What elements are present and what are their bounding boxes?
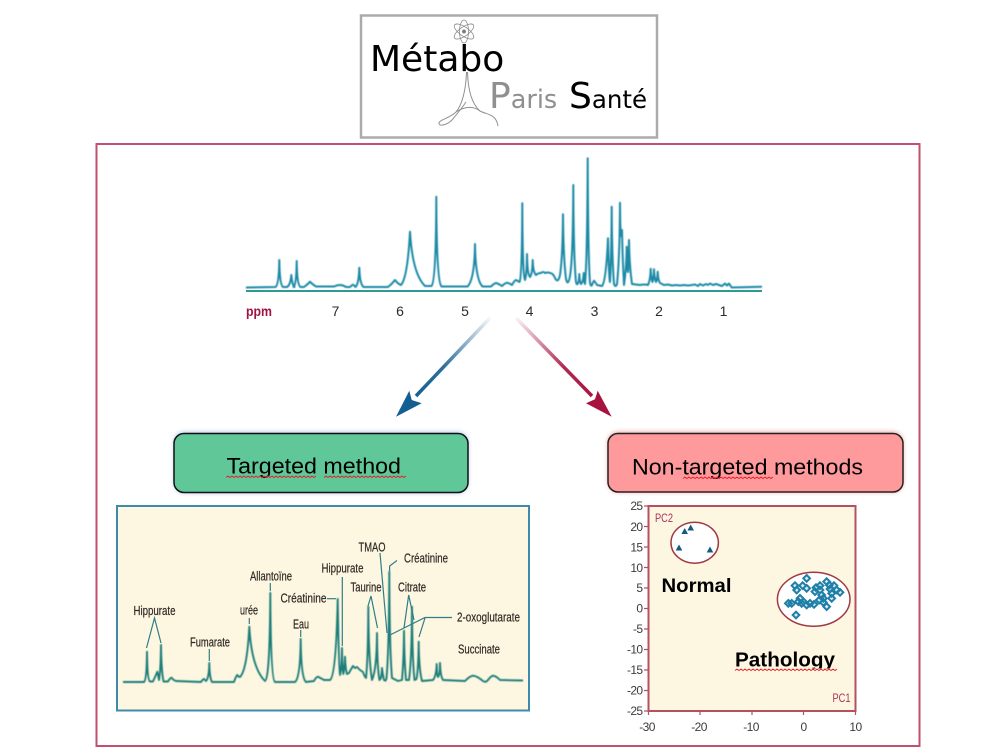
y axis labels: 0 xyxy=(636,602,643,616)
spectrum axis labels: 2 xyxy=(655,303,663,319)
y axis labels: 5 xyxy=(636,581,643,595)
box: non-targeted methods xyxy=(608,432,903,492)
spectrum axis labels: 7 xyxy=(332,303,340,319)
x axis labels: 0 xyxy=(800,720,807,734)
box: targeted method: Targeted method xyxy=(226,454,401,479)
connector lines xyxy=(146,553,452,661)
x axis labels: 10 xyxy=(849,720,862,734)
panel: targeted spectrum xyxy=(117,506,529,710)
logo text: Santé xyxy=(569,76,647,117)
metabolite labels: Fumarate xyxy=(190,636,230,650)
metabolite labels: 2-oxoglutarate xyxy=(457,610,520,624)
y axis labels: -10 xyxy=(627,642,643,656)
panel: main frame xyxy=(96,144,920,746)
spectrum axis labels: 1 xyxy=(720,303,728,319)
spectrum axis labels: 3 xyxy=(591,303,599,319)
label: Normal: Normal xyxy=(662,575,732,597)
logo: Métabo Paris Santé xyxy=(361,16,657,138)
spectrum axis labels: ppm xyxy=(246,303,272,319)
metabolite labels: Créatinine xyxy=(404,552,448,566)
spectrum axis labels: 6 xyxy=(396,303,404,319)
metabolite labels: TMAO xyxy=(358,540,386,554)
x axis labels: -20 xyxy=(691,720,708,734)
axis names: PC2 xyxy=(655,513,673,525)
x axis labels xyxy=(639,720,862,734)
box: targeted method xyxy=(174,432,468,493)
metabolite labels: Taurine xyxy=(350,580,382,594)
metabolite labels: Créatinine xyxy=(280,592,327,606)
metabolite labels: Hippurate xyxy=(134,604,176,618)
y axis labels xyxy=(627,499,643,718)
logo text: Paris xyxy=(489,76,557,117)
metabolite labels: Allantoïne xyxy=(250,570,292,584)
metabolite labels: Eau xyxy=(293,618,309,632)
x axis labels: -30 xyxy=(639,720,656,734)
icon: Eiffel tower outline xyxy=(439,72,498,126)
spectrum axis labels: 5 xyxy=(461,303,469,319)
arrow: to non-targeted methods xyxy=(516,318,612,417)
metabolite labels: Hippurate xyxy=(322,562,364,576)
logo text: Métabo xyxy=(370,39,504,80)
y axis labels: 25 xyxy=(630,499,643,513)
y axis labels: 20 xyxy=(630,520,643,534)
y axis labels: -25 xyxy=(627,704,643,718)
y axis labels: -15 xyxy=(627,663,643,677)
metabolite labels: Citrate xyxy=(398,580,426,594)
icon: atom xyxy=(452,20,476,43)
metabolite labels xyxy=(134,540,520,656)
y axis labels: -5 xyxy=(633,622,643,636)
label: Pathology: Pathology xyxy=(735,649,836,672)
spectrum axis labels: 4 xyxy=(526,303,534,319)
arrow: to targeted method xyxy=(396,318,490,417)
y axis labels: 15 xyxy=(630,540,643,554)
cluster: pathology xyxy=(777,572,850,626)
annotated spectrum trace xyxy=(123,572,523,682)
axis ticks xyxy=(644,506,856,715)
chart: NMR spectrum xyxy=(246,158,762,319)
y axis labels: -20 xyxy=(627,684,643,698)
logo text xyxy=(370,39,647,117)
x axis labels: -10 xyxy=(743,720,760,734)
cluster: normal xyxy=(671,522,718,563)
chart: PCA scatter plot xyxy=(627,499,862,734)
chart: PCA scatter plot: PC1 xyxy=(832,693,850,705)
y axis labels: 10 xyxy=(630,561,643,575)
metabolite labels: urée xyxy=(240,604,258,618)
box: non-targeted methods: Non-targeted methods xyxy=(632,455,863,480)
metabolite labels: Succinate xyxy=(458,642,500,656)
spectrum axis labels xyxy=(246,303,728,319)
